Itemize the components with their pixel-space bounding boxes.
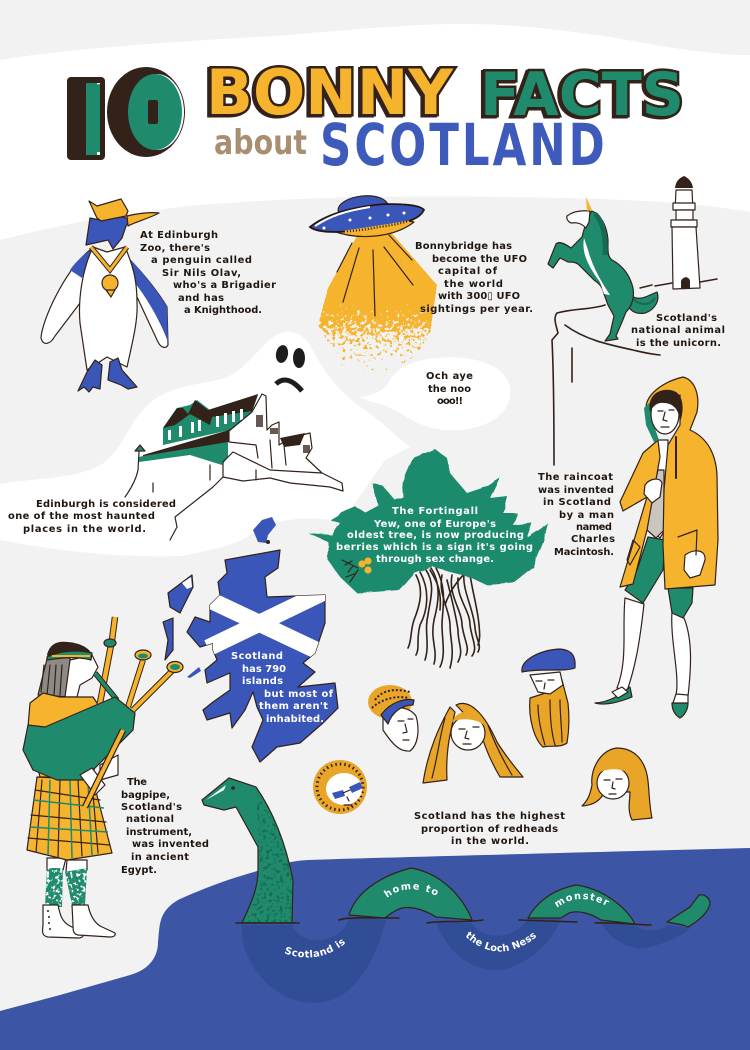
- fact text: raincoat: was invented: [538, 485, 614, 496]
- title numeral 10: 1: [64, 63, 119, 173]
- fact text: UFO: with 300▯ UFO: [438, 291, 520, 302]
- title numeral 10: [67, 67, 185, 160]
- panel: Fortingall Yew: [308, 449, 548, 668]
- icon: beard man: [522, 649, 575, 747]
- icon: Nessie rear hump: [528, 885, 635, 924]
- white haunted hill with ghost: [0, 332, 410, 556]
- fact text: islands: has 790: [242, 664, 286, 675]
- fact text: bagpipe: was invented: [132, 839, 209, 850]
- fact text: UFO: become the UFO: [432, 254, 527, 265]
- fact text: penguin: who's a Brigadier: [173, 280, 276, 291]
- fact text: UFO: the world: [444, 279, 503, 290]
- icon: Nessie head and neck: [202, 778, 293, 923]
- fact text: bagpipe: Scotland's: [121, 802, 182, 813]
- icon: unicorn: [548, 197, 658, 341]
- panel: penguin: [41, 199, 276, 392]
- icon: Edinburgh castle: [125, 394, 343, 540]
- fact text: redheads: proportion of redheads: [421, 824, 558, 835]
- icon: flying saucer: [310, 193, 424, 237]
- icon: yew trunk roots: [408, 568, 480, 668]
- icon: berries sprig: [342, 557, 372, 582]
- title word about: about: [214, 123, 307, 163]
- icon: bun girl: [368, 685, 418, 751]
- fact text: islands: but most of: [264, 689, 334, 700]
- fact text: redheads: Scotland has the highest: [414, 811, 565, 822]
- icon: penguin: [41, 199, 168, 392]
- fact text: unicorn: [631, 313, 725, 349]
- fact text: penguin: and has: [178, 293, 224, 304]
- fact text: UFO: [415, 241, 533, 315]
- fact text: yew: oldest tree, is now producing: [347, 530, 524, 541]
- icon: Scotland map with saltire: [163, 517, 338, 762]
- fact text: yew: Yew, one of Europe's: [373, 519, 496, 530]
- fact text: yew: The Fortingall: [392, 506, 478, 517]
- fact text: raincoat: [538, 472, 615, 558]
- fact text: unicorn: national animal: [631, 325, 725, 336]
- panel: ghost and castle: [8, 344, 510, 540]
- fact text: bagpipe: national: [126, 814, 174, 825]
- fact text: bagpipe: The: [127, 777, 147, 788]
- icon: sunglasses man: [313, 760, 367, 814]
- fact text: Loch Ness monster: home to: [384, 884, 438, 898]
- icon: yew leaf canopy: [308, 449, 548, 593]
- icon: long hair girl: [423, 703, 523, 783]
- panel: UFO: [310, 193, 533, 378]
- fact text: bagpipe: [121, 777, 209, 876]
- fact text: penguin: [140, 230, 276, 316]
- fact text: islands: them aren't: [259, 701, 328, 712]
- icon: Nessie front hump: [349, 868, 472, 920]
- title word BONNY: BONNY: [206, 56, 454, 129]
- fact text: islands: islands: [242, 676, 283, 687]
- title word SCOTLAND: SCOTLAND: [320, 112, 608, 180]
- fact text: haunted Edinburgh: [8, 499, 176, 535]
- fact text: bagpipe: Egypt.: [121, 865, 157, 876]
- fact text: haunted Edinburgh: Edinburgh is considered: [36, 499, 176, 510]
- speech bubble: ooo!!: [437, 396, 463, 407]
- icon: man in yellow raincoat: [595, 377, 718, 718]
- fact text: yew: [336, 506, 533, 565]
- fact text: Loch Ness monster: the Loch Ness: [466, 932, 536, 952]
- fact text: UFO: capital of: [438, 266, 498, 277]
- icon: Nessie tail: [667, 895, 710, 927]
- icon: UFO beam: [318, 230, 437, 378]
- icon: ghost face: [275, 344, 305, 391]
- fact text: penguin: a penguin called: [151, 255, 252, 266]
- title: [67, 65, 682, 166]
- panel: map of Scotland: [163, 517, 338, 762]
- fact text: UFO: sightings per year.: [420, 304, 533, 315]
- fact text: raincoat: The raincoat: [538, 472, 613, 483]
- waterlines: [236, 918, 651, 925]
- fact text: raincoat: in Scotland: [543, 497, 611, 508]
- fact text: bagpipe: bagpipe,: [121, 790, 170, 801]
- icon: fair-haired girl: [582, 748, 652, 820]
- speech bubble: the noo: [428, 384, 471, 395]
- water: [0, 848, 750, 1050]
- fact text: islands: inhabited.: [266, 714, 324, 725]
- panel: raincoat man: [538, 377, 718, 718]
- underwater monster shadow: [242, 918, 690, 1003]
- fact text: bagpipe: in ancient: [131, 852, 189, 863]
- fact text: bagpipe: instrument,: [126, 827, 192, 838]
- fact text: islands: [231, 651, 334, 725]
- fact text: redheads: [414, 811, 565, 847]
- fact text: Loch Ness monster: Scotland is: [284, 939, 345, 958]
- fact text: haunted Edinburgh: one of the most haunted: [8, 511, 155, 522]
- icon: bagpiper: [23, 617, 183, 938]
- fact text: UFO: Bonnybridge has: [415, 241, 512, 252]
- title word FACTS: FACTS: [480, 60, 684, 130]
- speech bubble: [360, 357, 510, 430]
- panel: Loch Ness: [0, 777, 750, 1050]
- speech bubble: Och aye: [426, 371, 473, 382]
- fact text: raincoat: Charles: [571, 534, 615, 545]
- fact text: yew: through sex change.: [376, 554, 494, 565]
- white header band: [0, 24, 750, 240]
- fact text: raincoat: Macintosh.: [554, 547, 614, 558]
- fact text: haunted Edinburgh: places in the world.: [23, 524, 146, 535]
- fact text: islands: Scotland: [231, 651, 283, 662]
- fact text: yew: berries which is a sign it's going: [336, 542, 533, 553]
- panel: bagpiper: [23, 617, 209, 938]
- fact text: Loch Ness monster: [284, 884, 610, 958]
- panel: unicorn and lighthouse: [548, 176, 725, 465]
- fact text: penguin: Sir Nils Olav,: [162, 268, 241, 279]
- fact text: raincoat: by a man: [559, 510, 614, 521]
- icon: lighthouse: [640, 176, 717, 289]
- fact text: penguin: a Knighthood.: [184, 305, 262, 316]
- fact text: penguin: At Edinburgh: [140, 230, 218, 241]
- fact text: redheads: in the world.: [451, 836, 529, 847]
- title numeral 10: 0: [136, 77, 173, 151]
- fact text: Loch Ness monster: monster: [554, 893, 610, 908]
- fact text: raincoat: named: [576, 522, 612, 533]
- icon: cliff: [552, 305, 660, 465]
- fact text: penguin: Zoo, there's: [140, 243, 210, 254]
- fact text: unicorn: Scotland's: [656, 313, 717, 324]
- panel: redheads: [313, 649, 652, 847]
- fact text: unicorn: is the unicorn.: [636, 338, 721, 349]
